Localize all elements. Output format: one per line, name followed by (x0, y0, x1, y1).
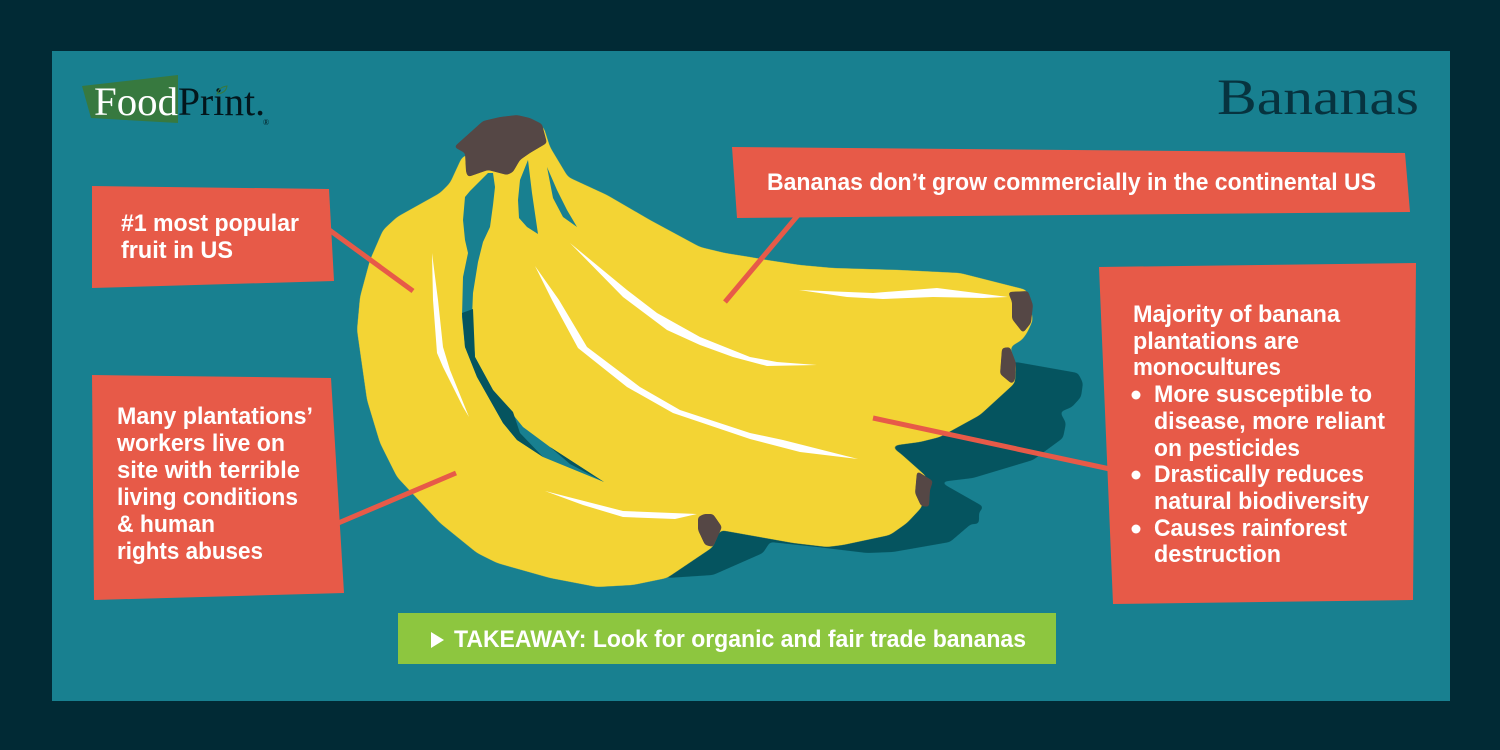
callout: monocultures: disease, more reliant (1154, 408, 1385, 435)
banana tip 2 (1000, 347, 1016, 384)
callout: monocultures (1099, 263, 1416, 604)
callout: monocultures: Causes rainforest (1154, 515, 1347, 542)
callout: plantation workers: rights abuses (117, 538, 263, 565)
callout: monocultures: destruction (1154, 541, 1281, 568)
logo: FoodPrint: Print. (178, 79, 265, 124)
banana tip 3 (915, 471, 933, 507)
callout: monocultures: on pesticides (1154, 435, 1300, 462)
upper stem gap (518, 160, 538, 234)
callout: plantation workers (92, 375, 344, 600)
callout: most popular fruit: fruit in US (121, 237, 233, 264)
logo: FoodPrint: ® (263, 118, 269, 127)
callout: most popular fruit (92, 186, 334, 288)
title: Bananas: Bananas (1217, 70, 1419, 126)
callout: plantation workers: site with terrible (117, 457, 300, 484)
highlight: top right banana (799, 288, 1008, 299)
banana tip 4 (698, 514, 722, 547)
callout: monocultures: plantations are (1133, 328, 1299, 355)
callout: plantation workers: & human (117, 511, 215, 538)
banana body (357, 125, 1033, 587)
highlight: upper banana (570, 243, 817, 366)
connector: commercial growth (725, 214, 799, 302)
inner stem gap (547, 167, 577, 227)
gap between bananas (462, 173, 604, 482)
callout: most popular fruit: #1 most popular (121, 210, 299, 237)
callout: monocultures: Majority of banana (1133, 301, 1341, 328)
callout: plantation workers: workers live on (116, 430, 285, 457)
callout: not grown in continental US (732, 147, 1410, 218)
highlight: middle banana (535, 266, 858, 459)
takeaway banner: TAKEAWAY: Look for organic and fair trade bananas (454, 626, 1026, 653)
connector: workers (336, 473, 456, 524)
callout: monocultures: More susceptible to (1154, 381, 1372, 408)
takeaway banner (398, 613, 1056, 664)
callout: plantation workers: living conditions (117, 484, 298, 511)
connector: popular fruit (328, 229, 413, 291)
highlight: left banana (432, 253, 469, 417)
callout: monocultures: monocultures (1133, 354, 1281, 381)
logo: FoodPrint: Food (94, 79, 178, 124)
banana tip 1 (1008, 291, 1033, 333)
stem cap (454, 115, 547, 177)
callout: plantation workers: Many plantations’ (117, 403, 313, 430)
banana shadow (640, 362, 1083, 578)
connector: monocultures (873, 418, 1110, 469)
shadow sliver (550, 447, 604, 482)
callout: not grown in continental US: Bananas don’t grow commercially in the continental US (767, 169, 1376, 196)
callout: monocultures: Drastically reduces (1154, 461, 1364, 488)
highlight: bottom banana (545, 491, 697, 519)
logo: FoodPrint (82, 75, 269, 127)
illustration: banana bunch (357, 115, 1083, 587)
shadow in gap (462, 309, 543, 457)
callout: monocultures: natural biodiversity (1154, 488, 1370, 515)
